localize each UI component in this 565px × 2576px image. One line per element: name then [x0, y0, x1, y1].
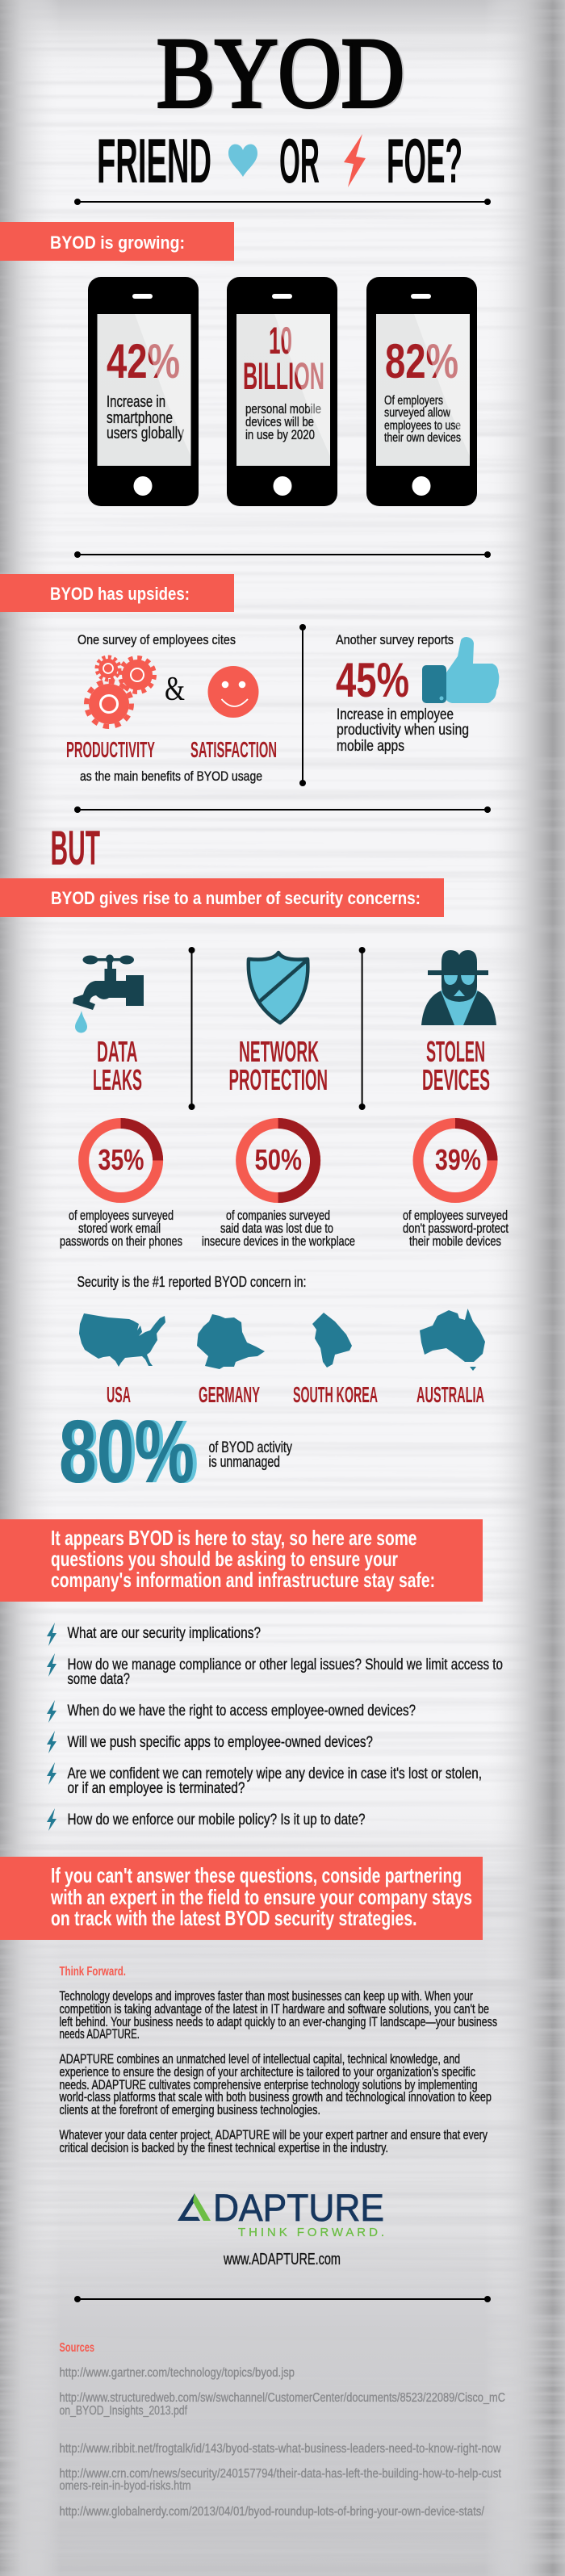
callout: partner with an expert [0, 1857, 483, 1940]
phone: 10 billion: devices will be [245, 414, 314, 429]
map: Germany: GERMANY [199, 1382, 260, 1407]
map: Germany [197, 1314, 265, 1407]
stat: 80% unmanaged: 80% [61, 1402, 199, 1502]
phone: 82%: their own devices [384, 431, 461, 445]
logo: ADAPTURE [178, 2186, 384, 2239]
icon: smiley [208, 666, 258, 718]
phone: 10 billion: BILLION [243, 354, 324, 397]
icon: bullet bolt [47, 1731, 56, 1753]
panel: benefits survey: PRODUCTIVITY [66, 737, 155, 762]
map: South Korea [293, 1313, 378, 1407]
text: stat captions column 2: said data was lost due to [220, 1221, 333, 1236]
phone: 10 billion [227, 277, 337, 506]
panel: network protection: NETWORK [239, 1035, 319, 1068]
icon: bullet bolt [47, 1700, 56, 1723]
phone: 42%: smartphone [107, 409, 173, 427]
phone: 10 billion: 10 [269, 319, 292, 362]
list: questions [47, 1623, 503, 1831]
icon: bullet bolt [47, 1623, 56, 1646]
text block: Think Forward: needs ADAPTURE. [60, 2027, 140, 2042]
text: stat captions column 3: don't password-protect [403, 1221, 508, 1236]
panel: benefits survey: One survey of employees cites [77, 632, 236, 647]
text block: sources: http://www.gartner.com/technology/topics/byod.jsp [60, 2366, 295, 2380]
stat: 80% unmanaged: 80% [59, 1402, 195, 1502]
phone: 10 billion: personal mobile [245, 401, 321, 417]
text block: sources: omers-rein-in-byod-risks.htm [60, 2479, 190, 2493]
panel: data leaks: DATA [97, 1035, 138, 1068]
icon: spy [421, 950, 496, 1025]
text: stat captions column 3 [403, 1208, 508, 1249]
phone: 82%: surveyed allow [384, 406, 450, 420]
phone: 42%: users globally [107, 425, 184, 442]
panel: productivity stat [336, 632, 499, 755]
text: stat captions column 1: passwords on their phones [60, 1234, 182, 1249]
text: stat captions column 2: of companies surveyed [226, 1208, 330, 1223]
title: BYOD: BYOD [157, 18, 404, 128]
text: stat captions column 2 [202, 1208, 355, 1249]
heading: BYOD has upsides [0, 574, 234, 612]
list: questions: How do we enforce our mobile policy? Is it up to date? [68, 1812, 365, 1828]
heading: security concerns [0, 878, 444, 917]
panel: network protection: PROTECTION [229, 1063, 328, 1096]
stat: 80% unmanaged: is unmanaged [208, 1454, 280, 1471]
text block: sources: Sources [60, 2341, 94, 2355]
list: questions: Will we push specific apps to employee-owned devices? [68, 1734, 373, 1751]
text: stat captions column 1: of employees surveyed [69, 1208, 174, 1223]
map: USA: USA [107, 1382, 131, 1407]
icon: shield [249, 953, 308, 1023]
text block: Think Forward: Think Forward. [60, 1965, 126, 1979]
subtitle: friend or foe [97, 125, 462, 196]
title: BYOD: BYOD [158, 19, 406, 129]
infographic: BUT [50, 821, 100, 875]
icon: lightning bolt [344, 134, 366, 187]
panel: stolen devices: STOLEN [426, 1035, 485, 1068]
donut chart: 39%: 39% [435, 1143, 481, 1176]
callout: questions intro [0, 1519, 483, 1602]
icon: gears [86, 657, 154, 727]
panel: benefits survey: SATISFACTION [190, 737, 277, 762]
text block: Think Forward [59, 1965, 497, 2155]
panel: productivity stat: mobile apps [337, 738, 404, 755]
subtitle: friend or foe: FRIEND [97, 125, 211, 196]
panel: benefits survey: as the main benefits of BYOD usage [80, 769, 262, 784]
icon: bullet bolt [47, 1653, 56, 1677]
donut chart: 35% [84, 1124, 158, 1198]
donut chart: 35%: 35% [98, 1143, 144, 1176]
panel: stolen devices: DEVICES [422, 1063, 490, 1096]
panel: productivity stat: Another survey reports [336, 632, 454, 647]
heading: BYOD has upsides: BYOD has upsides: [50, 584, 190, 604]
text block: Think Forward: critical decision is backed by the finest technical expertise in the industry. [60, 2141, 388, 2155]
phone: 10 billion: in use by 2020 [245, 427, 315, 442]
text: security concern intro: Security is the #1 reported BYOD concern in: [77, 1274, 307, 1290]
icon: bullet bolt [47, 1808, 56, 1831]
donut chart: 50%: 50% [255, 1143, 302, 1176]
heading: BYOD is growing: BYOD is growing: [50, 232, 185, 253]
callout: questions intro: company's information and infrastructure stay safe: [51, 1568, 435, 1592]
phone: 82% [366, 277, 477, 506]
heading: security concerns: BYOD gives rise to a number of security concerns: [51, 888, 421, 908]
phone: 42% [88, 277, 199, 506]
logo: ADAPTURE: DAPTURE [213, 2186, 384, 2229]
text block: Think Forward: clients at the forefront of emerging business technologies. [60, 2103, 320, 2117]
panel: data leaks: LEAKS [93, 1063, 142, 1096]
phone: 82%: 82% [385, 334, 458, 388]
text block: sources [60, 2341, 505, 2519]
icon: heart [228, 145, 257, 177]
list: questions: What are our security implications? [68, 1625, 261, 1642]
phone: 42%: 42% [107, 334, 180, 388]
list: questions: or if an employee is terminated? [68, 1780, 245, 1797]
list: questions: When do we have the right to access employee-owned devices? [68, 1703, 416, 1719]
panel: data leaks [73, 954, 144, 1096]
heading: BYOD is growing [0, 222, 234, 261]
subtitle: friend or foe: OR [279, 125, 320, 196]
text: stat captions column 3: of employees surveyed [403, 1208, 508, 1223]
phone: 42%: Increase in [107, 393, 165, 411]
phone: 82%: Of employers [384, 394, 443, 408]
panel: network protection [229, 953, 328, 1096]
list: questions: some data? [68, 1671, 130, 1688]
map: USA [79, 1313, 165, 1407]
panel: productivity stat: Increase in employee [337, 706, 454, 723]
map: Australia: AUSTRALIA [416, 1382, 484, 1407]
text: stat captions column 1: stored work email [78, 1221, 161, 1236]
panel: productivity stat: 45% [336, 653, 409, 707]
text: website: www.ADAPTURE.com [223, 2251, 341, 2268]
panel: stolen devices [421, 950, 496, 1096]
callout: partner with an expert: on track with the latest BYOD security strategies. [51, 1906, 416, 1930]
icon: thumbs up [422, 637, 499, 703]
map: Australia [416, 1309, 485, 1407]
callout: questions intro: It appears BYOD is here to stay, so here are some [51, 1526, 416, 1550]
text block: sources: on_BYOD_Insights_2013.pdf [60, 2404, 187, 2418]
donut chart: 50% [241, 1124, 316, 1198]
infographic: FOE? [387, 125, 462, 196]
text block: sources: http://www.globalnerdy.com/2013/04/01/byod-roundup-lots-of-bring-your-own-device-stats/ [60, 2505, 484, 2519]
donut chart: 39% [418, 1124, 492, 1198]
panel: productivity stat: productivity when using [337, 722, 469, 739]
ampersand: & [165, 671, 185, 708]
map: South Korea: SOUTH KOREA [293, 1382, 378, 1407]
stat: 80% unmanaged: of BYOD activity [208, 1439, 292, 1456]
phone: 82%: employees to use [384, 419, 461, 433]
icon: faucet [73, 954, 144, 1033]
callout: questions intro: questions you should be asking to ensure your [51, 1547, 398, 1571]
icon: bullet bolt [47, 1762, 56, 1785]
panel: benefits survey [66, 632, 277, 784]
text: stat captions column 3: their mobile devices [409, 1234, 501, 1249]
text: stat captions column 1 [60, 1208, 182, 1249]
text: stat captions column 2: insecure devices in the workplace [202, 1234, 355, 1249]
logo: ADAPTURE: THINK FORWARD. [238, 2226, 384, 2239]
